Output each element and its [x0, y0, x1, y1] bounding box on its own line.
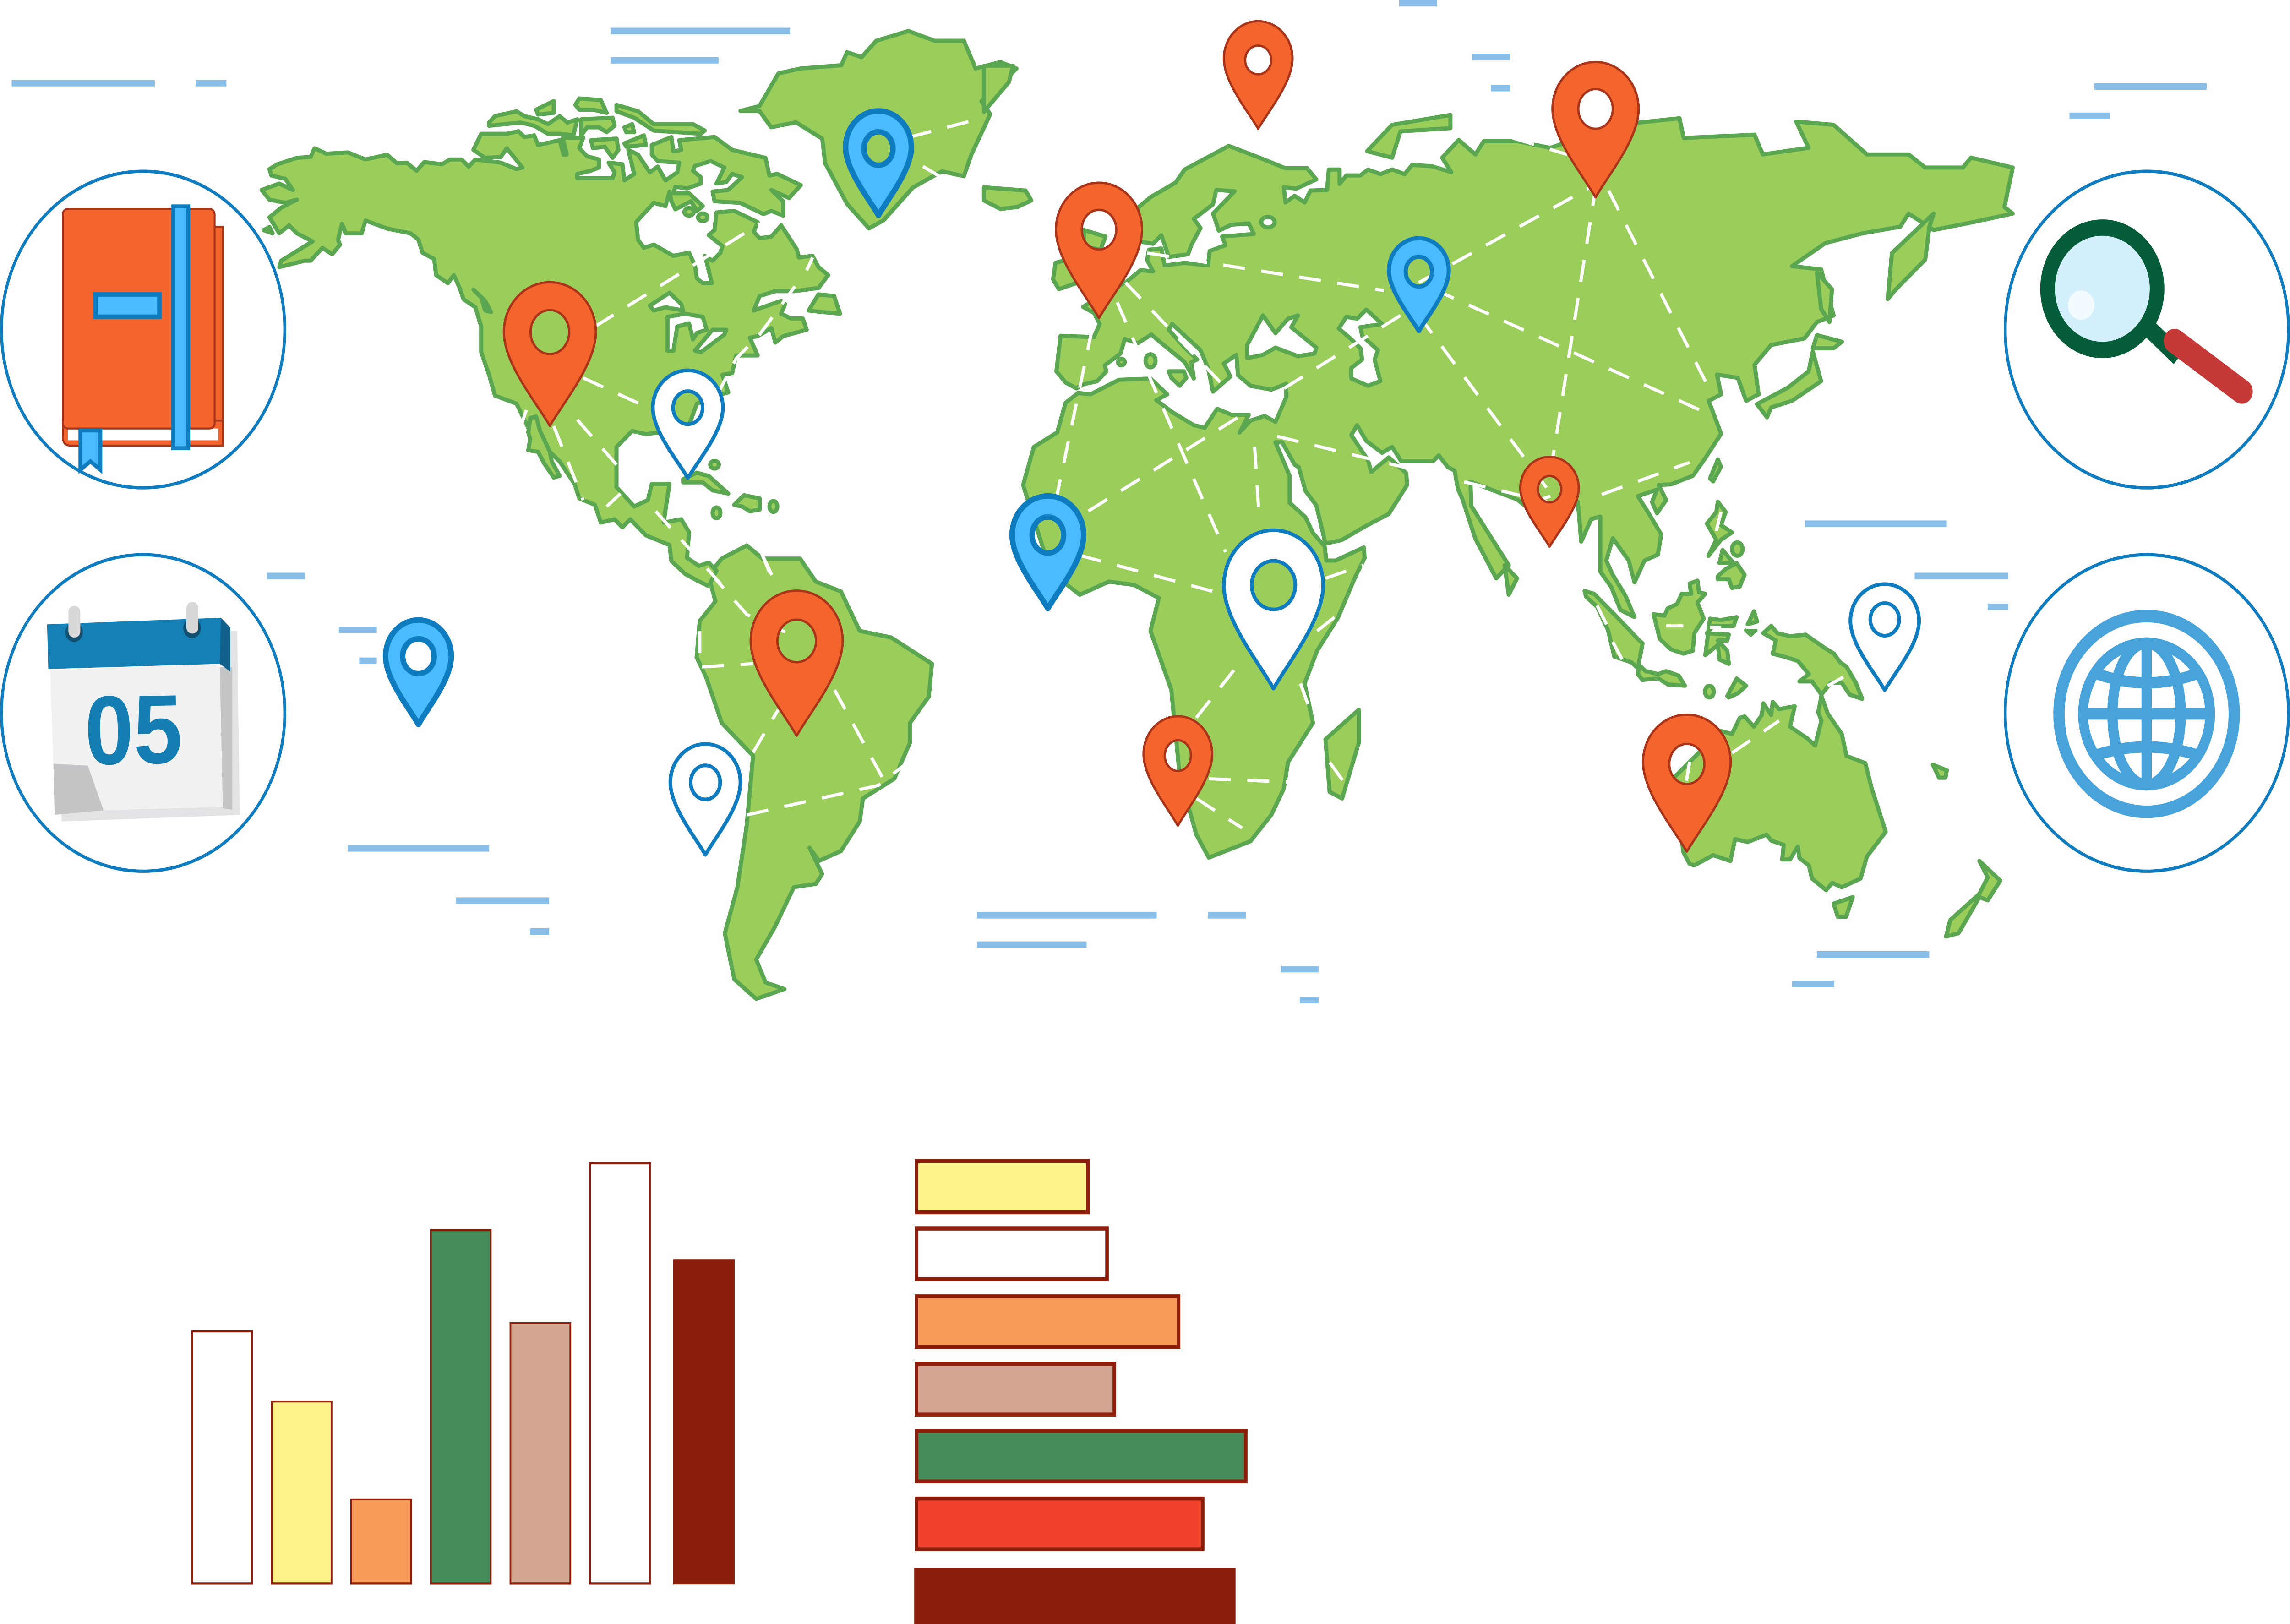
Madagascar	[1325, 710, 1359, 798]
panel: notebook icon circle	[1, 171, 285, 488]
pin: West Africa blue	[1012, 496, 1084, 609]
Sulawesi	[1705, 617, 1737, 664]
Australia	[1674, 696, 1886, 890]
Baja California	[528, 416, 560, 478]
panel: globe icon circle	[2005, 555, 2289, 871]
Greenland	[741, 31, 1016, 229]
Tasmania, New Zealand	[1834, 861, 2000, 937]
pin: Pacific white	[671, 744, 741, 855]
Caribbean islands	[683, 461, 777, 518]
pin: Arctic orange	[1224, 21, 1292, 129]
pin: Oceania white	[1850, 584, 1919, 690]
inland seas	[1247, 217, 1382, 386]
icon: globe	[2059, 616, 2234, 812]
icon: notebook	[63, 207, 223, 470]
calendar date: 05	[84, 674, 183, 785]
Sumatra	[1585, 591, 1642, 668]
world map: South America	[690, 545, 932, 999]
world map: Eurasia and Africa	[984, 65, 2013, 937]
South America landmass	[690, 545, 932, 999]
decorative light blue dashes	[12, 0, 2207, 1003]
pin: Europe orange	[1056, 183, 1142, 318]
pin: Greenland blue	[845, 111, 911, 215]
pin: India orange	[1521, 457, 1579, 547]
pin: Australia orange	[1643, 714, 1731, 852]
pin: USA white	[653, 371, 723, 478]
pin: USA orange	[504, 282, 596, 426]
Greenland routes	[910, 117, 984, 178]
Eurasia and Africa landmass	[1023, 118, 2013, 858]
Great Lakes	[650, 293, 726, 352]
panel: magnifier icon circle	[2005, 171, 2289, 488]
Arctic islands	[489, 98, 708, 221]
pin: South America orange	[751, 591, 843, 736]
panel: calendar icon circle	[1, 555, 285, 871]
flight routes: South America	[700, 556, 904, 815]
New Caledonia	[1933, 765, 1947, 778]
Philippines	[1707, 502, 1745, 588]
world map: Southeast Asia and Australia	[1585, 459, 1947, 890]
Java	[1638, 665, 1685, 686]
flight routes: Southeast Asia and Australia	[1597, 463, 1843, 781]
pin: Southern Africa orange	[1144, 716, 1212, 826]
Taiwan, Seram and small islands	[1705, 459, 1757, 698]
pin: Pacific blue	[386, 620, 451, 725]
North America landmass	[262, 131, 828, 586]
pin: Asia blue	[1389, 238, 1449, 331]
flight routes: Eurasia and Africa	[1055, 138, 1709, 828]
icon: magnifying glass	[2048, 228, 2242, 392]
Newfoundland and coastal islands	[264, 227, 840, 314]
Borneo	[1653, 581, 1705, 654]
bar chart: vertical bars	[192, 1163, 735, 1584]
New Guinea	[1763, 626, 1862, 699]
bar chart: horizontal bars	[914, 1161, 1246, 1624]
pin: Russia orange	[1553, 62, 1639, 197]
pin: Africa white	[1224, 530, 1323, 689]
flight routes: North America	[520, 224, 812, 583]
icon: calendar	[47, 602, 240, 822]
world map: North America	[262, 98, 840, 586]
European and North Asian islands	[984, 65, 1934, 595]
